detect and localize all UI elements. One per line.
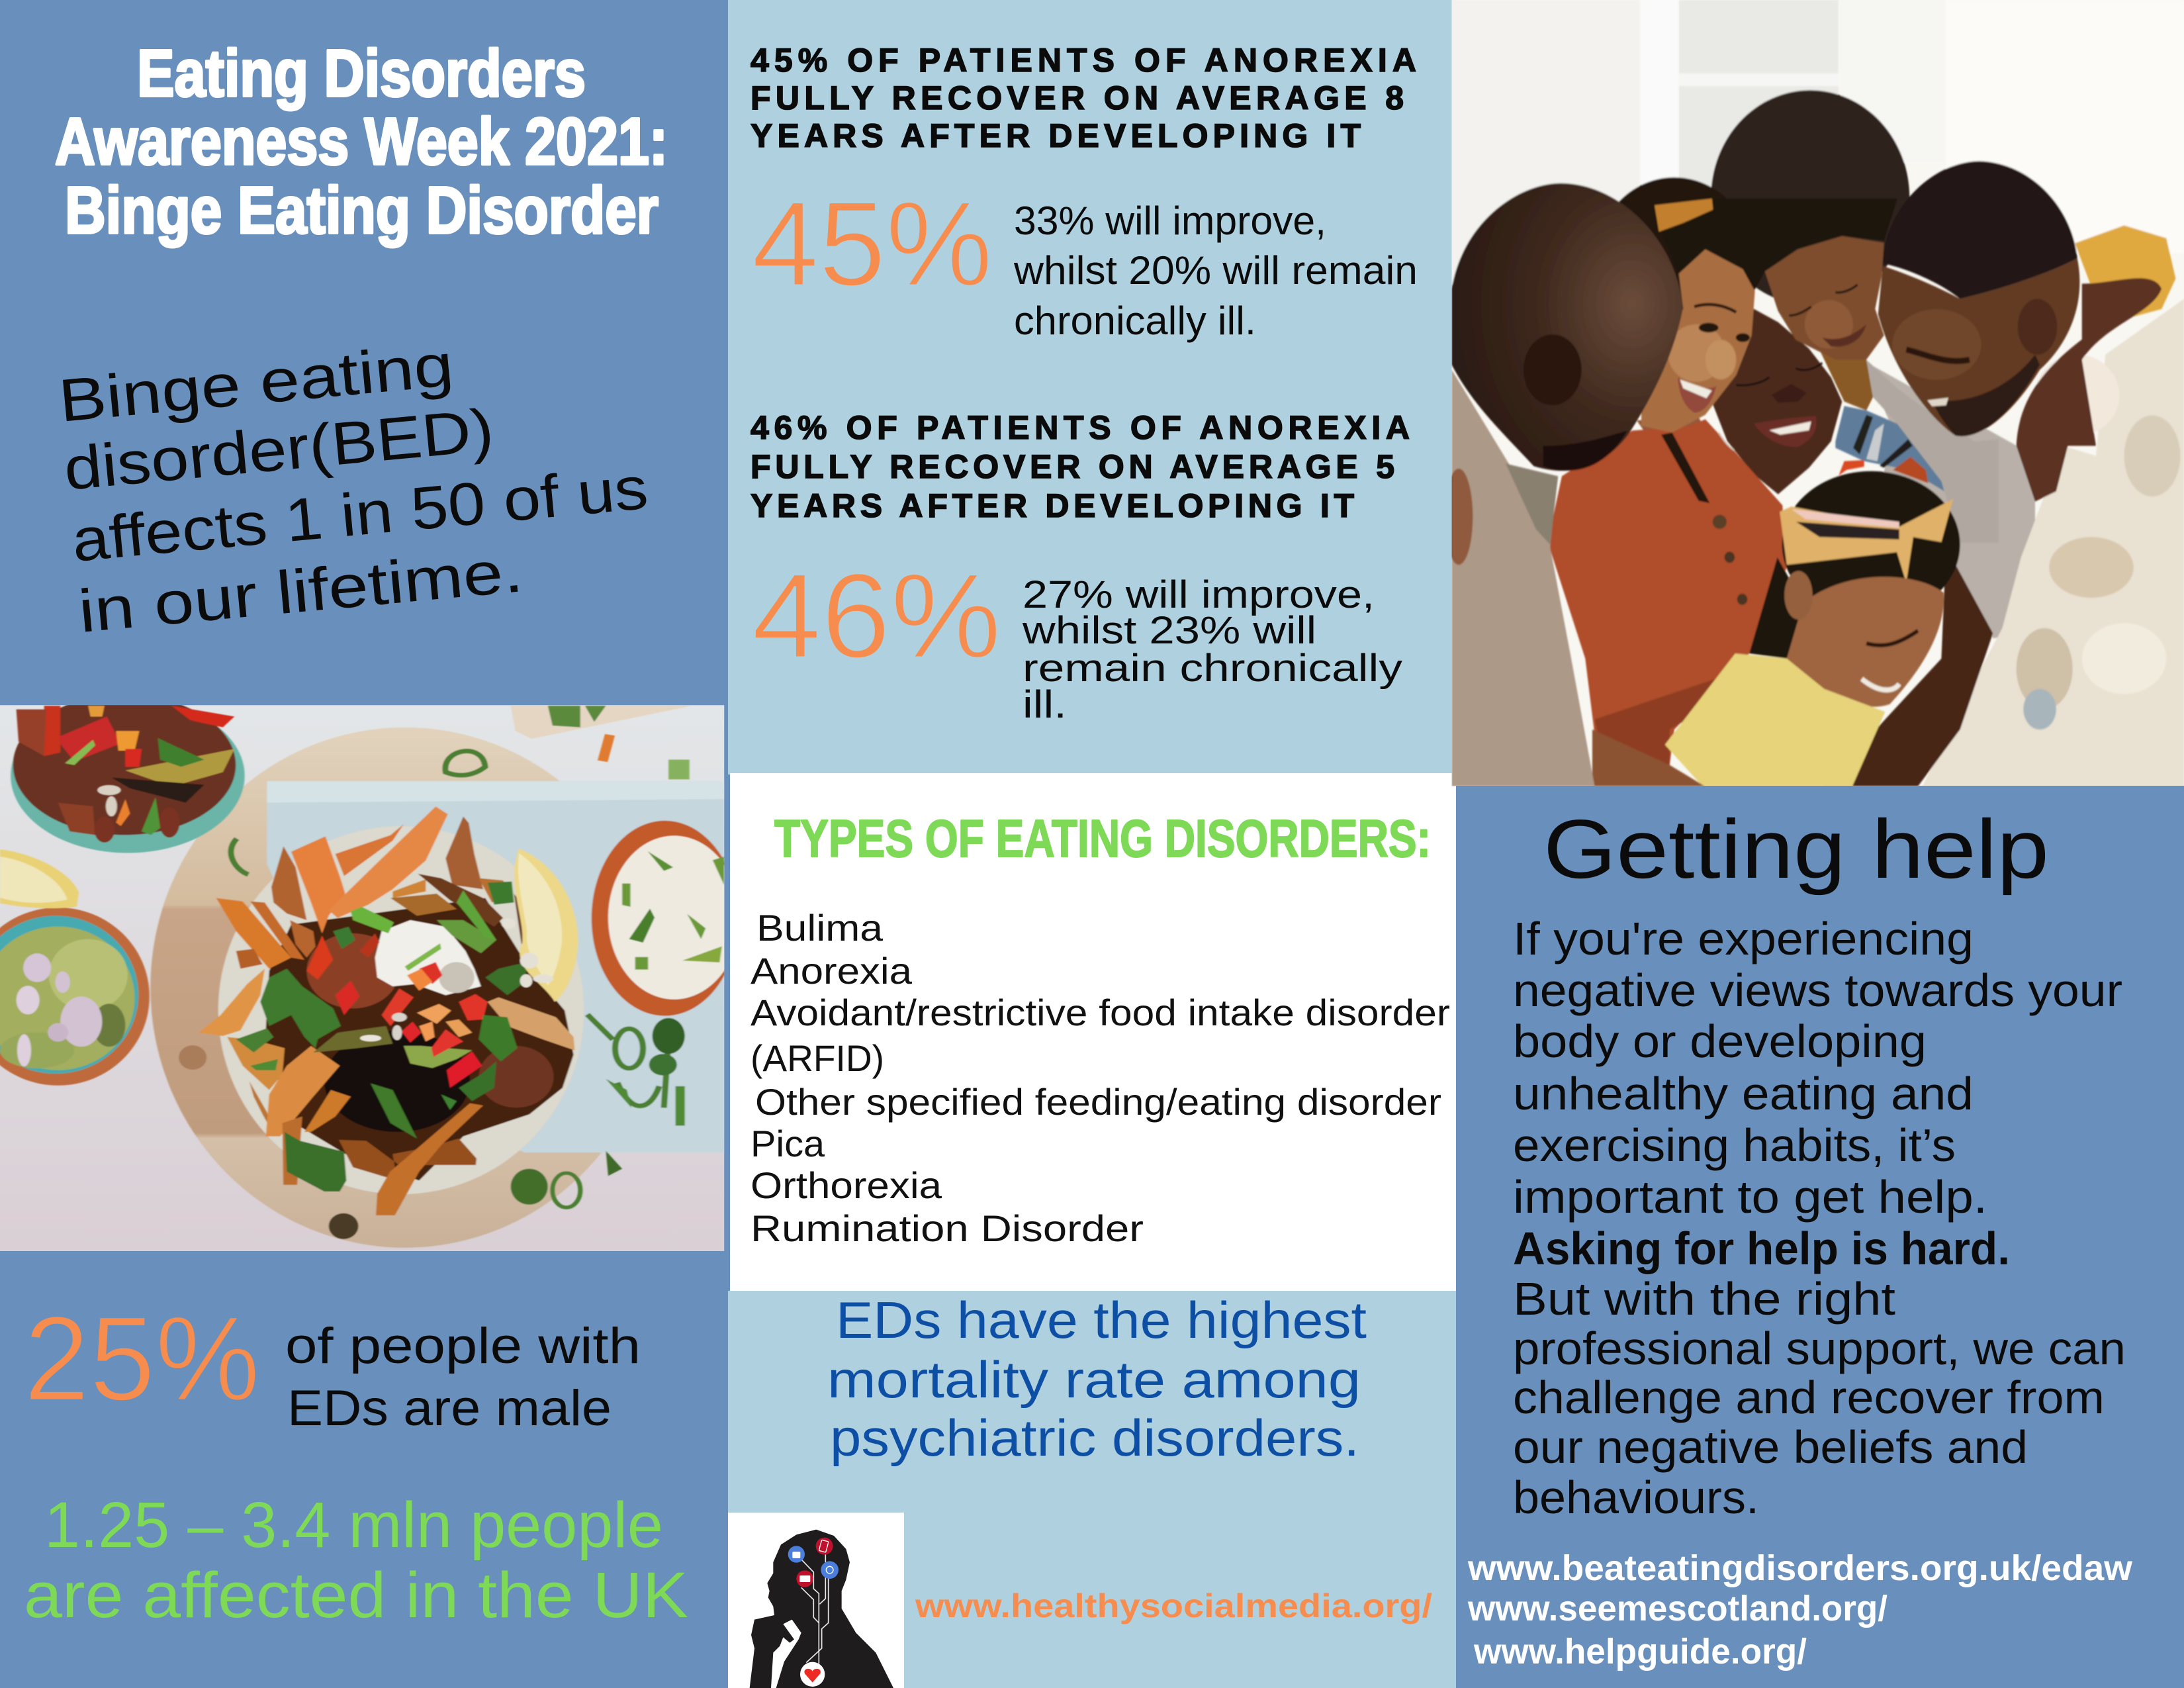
- right man face: [1878, 258, 2079, 436]
- text: advice: our negative beliefs and: [1513, 1421, 2028, 1473]
- text: mortality rate: mortality rate among: [827, 1350, 1361, 1409]
- statement: binge eating prevalence: in our lifetime.: [76, 538, 525, 645]
- text: advice: negative views towards your: [1513, 964, 2122, 1016]
- faces close-up: [1641, 199, 1999, 543]
- text: advice: body or developing: [1513, 1015, 1927, 1067]
- heading: 46% recovery: 46% OF PATIENTS OF ANOREXIA: [751, 409, 1410, 446]
- stat: 46%: 46%: [752, 548, 1001, 683]
- panel: intro: [0, 0, 728, 708]
- statement: binge eating prevalence: [56, 332, 651, 645]
- list of disorders: Other specified feeding/eating disorder: [755, 1081, 1441, 1123]
- heading: 46% recovery: [751, 409, 1410, 524]
- text: 27% improve: whilst 23% will: [1022, 609, 1316, 652]
- links: help websites: www.beateatingdisorders.org.uk/edaw: [1467, 1548, 2133, 1588]
- statement: binge eating prevalence: affects 1 in 50 of us: [69, 455, 651, 575]
- list of disorders: Anorexia: [751, 950, 913, 992]
- text: 27% improve: [1022, 573, 1402, 726]
- title: Binge Eating Disorder: [65, 173, 659, 248]
- text: of people with EDs are male: EDs are male: [287, 1380, 612, 1436]
- text: of people with EDs are male: of people with: [285, 1318, 641, 1374]
- white tee: [1862, 359, 2035, 638]
- heading: types: TYPES OF EATING DISORDERS:: [774, 809, 1431, 868]
- yellow blouse: [1665, 653, 1885, 786]
- text: advice: [1513, 913, 2126, 1523]
- link: healthysocialmedia: www.healthysocialmedia.org/: [915, 1587, 1432, 1624]
- text: advice: challenge and recover from: [1513, 1372, 2105, 1423]
- panel: recovery statistics: [728, 0, 1456, 774]
- heading: 45% recovery: YEARS AFTER DEVELOPING IT: [751, 117, 1361, 154]
- dark arm round girl: [1824, 547, 1993, 786]
- heading: 45% recovery: [751, 42, 1416, 154]
- woman hair: [1594, 177, 1754, 350]
- text: people affected in the UK: [24, 1489, 688, 1631]
- text: mortality rate: EDs have the highest: [836, 1291, 1367, 1349]
- panel: types of eating disorders: [730, 773, 1456, 1291]
- list of disorders: (ARFID): [751, 1037, 884, 1079]
- yellow sleeve: [2075, 226, 2175, 324]
- heading: 45% recovery: FULLY RECOVER ON AVERAGE 8: [751, 79, 1404, 117]
- lemon left: [0, 849, 79, 908]
- stat: 45%: 45%: [752, 176, 993, 311]
- text: advice: unhealthy eating and: [1513, 1068, 1974, 1119]
- bowl: guacamole: [0, 908, 150, 1086]
- bowl: sour cream: [592, 821, 738, 1016]
- list of disorders: [751, 907, 1450, 1249]
- icon: head silhouette with social media: [728, 1513, 904, 1688]
- white patterned jacket: [1923, 299, 2184, 786]
- plate contents: fries and toppings: [199, 806, 574, 1215]
- statement: binge eating prevalence: disorder(BED): [62, 397, 496, 503]
- right man hair: [1883, 161, 2077, 299]
- text: mortality rate: psychiatric disorders.: [830, 1409, 1359, 1467]
- text: people affected in the UK: are affected in the UK: [24, 1559, 688, 1631]
- text: advice: If you're experiencing: [1513, 913, 1974, 964]
- text: advice: important to get help.: [1513, 1171, 1987, 1223]
- woman dress: [1548, 426, 1787, 765]
- girl hair: [1782, 471, 1960, 618]
- woman neck: [1636, 417, 1702, 432]
- man left jacket: [1452, 370, 1594, 786]
- text: 27% improve: ill.: [1023, 683, 1067, 726]
- photo: family hug: [1445, 0, 2184, 786]
- statement: binge eating prevalence: Binge eating: [56, 332, 456, 435]
- bald man head: [1452, 183, 1683, 471]
- list of disorders: Bulima: [756, 907, 884, 949]
- text: advice: But with the right: [1513, 1273, 1895, 1325]
- text: advice: exercising habits, it’s: [1513, 1119, 1956, 1171]
- links: help websites: www.helpguide.org/: [1473, 1632, 1807, 1671]
- text: 27% improve: remain chronically: [1023, 647, 1402, 690]
- list of disorders: Rumination Disorder: [751, 1207, 1144, 1249]
- panel: male statistic: [0, 1251, 728, 1688]
- text: advice: professional support, we can: [1513, 1323, 2126, 1374]
- text: advice: behaviours.: [1513, 1472, 1759, 1523]
- text: advice: Asking for help is hard.: [1513, 1223, 2010, 1274]
- title: Eating Disorders: [137, 36, 586, 111]
- lemon wedge: [514, 849, 578, 1002]
- text: 33% improve: [1013, 199, 1418, 343]
- herbs on towel: [231, 751, 668, 1107]
- heading: 46% recovery: YEARS AFTER DEVELOPING IT: [751, 487, 1354, 524]
- list of disorders: Pica: [751, 1123, 825, 1164]
- lower arm: [1592, 729, 1705, 786]
- title: [55, 36, 668, 248]
- stat: 25%: 25%: [24, 1291, 260, 1426]
- links: help websites: www.seemescotland.org/: [1467, 1589, 1888, 1628]
- panel: getting help: [1456, 786, 2184, 1688]
- girl face: [1787, 577, 1944, 707]
- text: 33% improve: 33% will improve,: [1014, 199, 1326, 243]
- title: Awareness Week 2021:: [55, 105, 668, 179]
- heading: 46% recovery: FULLY RECOVER ON AVERAGE 5: [751, 448, 1394, 485]
- photo: food bowl: [0, 695, 740, 1251]
- list of disorders: Avoidant/restrictive food intake disorder: [751, 992, 1450, 1033]
- kid hair: [1711, 90, 1909, 305]
- text: mortality rate: [827, 1291, 1367, 1467]
- panel: mortality and link: [728, 1291, 1456, 1688]
- text: of people with EDs are male: [285, 1318, 641, 1436]
- links: help websites: [1467, 1548, 2133, 1671]
- bowl: chilli teal: [11, 698, 245, 853]
- arm over shoulder: [2017, 278, 2161, 502]
- text: 33% improve: chronically ill.: [1014, 299, 1256, 343]
- list of disorders: Orthorexia: [751, 1164, 942, 1206]
- text: 33% improve: whilst 20% will remain: [1013, 248, 1418, 293]
- text: people affected in the UK: 1.25 – 3.4 mln people: [44, 1489, 663, 1561]
- text: 27% improve: 27% will improve,: [1023, 573, 1375, 616]
- heading: 45% recovery: 45% OF PATIENTS OF ANOREXIA: [751, 42, 1416, 79]
- heading: getting help: Getting help: [1543, 802, 2049, 896]
